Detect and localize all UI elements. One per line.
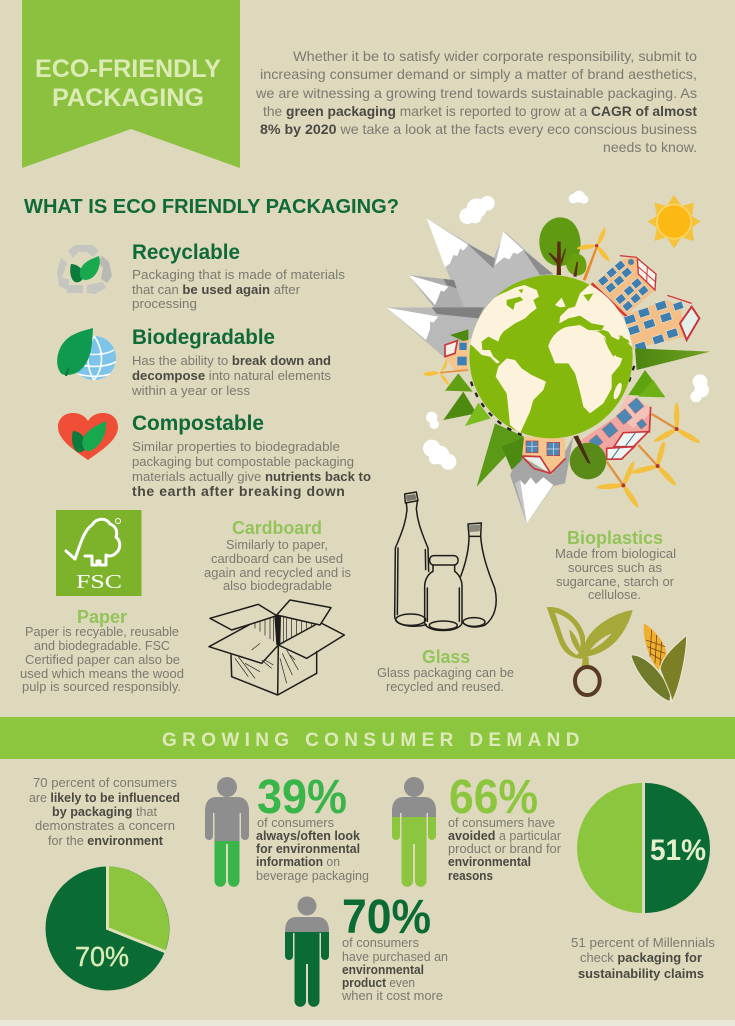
person stat: 70 percent: 70% <box>342 891 431 944</box>
stat text: 70 percent influenced: 70 percent of consumers <box>33 775 178 790</box>
cardboard text: cardboard can be used <box>211 551 343 566</box>
icon: FSC logo <box>56 510 142 596</box>
bottom: mountain, house, buildings, windmills <box>510 395 701 523</box>
recyclable text <box>132 267 346 311</box>
land: africa <box>548 325 622 413</box>
compostable text: Similar properties to biodegradable <box>132 439 340 454</box>
land: eurasia <box>559 283 635 350</box>
globe <box>467 275 635 438</box>
stat text: 51 percent of millennials: sustainability claims <box>578 966 704 981</box>
illustration: earth with mountains, trees and houses <box>387 191 710 523</box>
panel: cardboard <box>204 518 351 695</box>
spike tree right <box>635 348 710 370</box>
compostable text: materials actually give nutrients back to <box>132 469 371 484</box>
icon: sprout <box>547 607 633 695</box>
compostable text: the earth after breaking down <box>132 483 345 499</box>
stat text: 70 percent influenced: demonstrates a concern <box>35 818 175 833</box>
house bottom <box>522 437 566 473</box>
person stat: 66 percent: of consumers have <box>448 815 555 830</box>
bioplastics text: Made from biological <box>555 546 676 561</box>
person stat: 39 percent: beverage packaging <box>256 868 369 883</box>
panel: bioplastics <box>547 528 687 702</box>
intro paragraph: we are witnessing a growing trend towards sustainable packaging. As <box>255 85 697 101</box>
recyclable text: Packaging that is made of materials <box>132 267 346 282</box>
person stat: 66 percent: reasons <box>448 868 493 883</box>
panel: glass <box>377 492 514 694</box>
person stat: 39 percent: information on <box>256 854 340 869</box>
intro paragraph: increasing consumer demand or simply a matter of brand aesthetics, <box>260 66 697 82</box>
person stat: 39 percent <box>205 771 369 887</box>
seas <box>507 289 630 357</box>
paper heading: Paper <box>77 607 127 627</box>
person stat: 66 percent: product or brand for <box>448 841 562 856</box>
stat text: 70 percent influenced: by packaging that <box>52 804 157 819</box>
compostable text: packaging but compostable packaging <box>132 454 354 469</box>
section band: growing consumer demand: GROWING CONSUMER DEMAND <box>162 730 585 751</box>
header banner: ECO-FRIENDLY <box>35 55 221 83</box>
intro paragraph: Whether it be to satisfy wider corporate responsibility, submit to <box>293 48 697 64</box>
buildings right <box>592 256 710 370</box>
person stat: 70 percent: of consumers <box>342 935 419 950</box>
intro paragraph: 8% by 2020 we take a look at the facts every eco conscious business <box>260 121 697 137</box>
right trees <box>628 370 665 397</box>
pie chart: 51 percent <box>577 783 710 913</box>
glass heading: Glass <box>422 647 470 667</box>
glass text: recycled and reused. <box>386 679 504 694</box>
land: south america <box>496 358 546 433</box>
cardboard text: again and recycled and is <box>204 565 351 580</box>
biodegradable heading: Biodegradable <box>132 326 275 349</box>
recyclable text: processing <box>132 296 197 311</box>
bioplastics text: cellulose. <box>588 587 641 602</box>
person stat: 70 percent: when it cost more <box>341 988 443 1003</box>
person stat: 39 percent: always/often look <box>256 828 361 843</box>
recyclable heading: Recyclable <box>132 241 240 264</box>
windmills bottom right <box>597 403 701 509</box>
person stat: 70 percent: product even <box>342 975 415 990</box>
section heading: what is eco friendly packaging: WHAT IS ECO FRIENDLY PACKAGING? <box>24 196 399 218</box>
stat text: 70 percent influenced: are likely to be influenced <box>29 790 180 805</box>
trees bottom left <box>443 329 524 487</box>
windmill top <box>577 227 610 281</box>
person stat: 66 percent: environmental <box>448 854 531 869</box>
paper text <box>20 624 184 694</box>
paper text: and biodegradable. FSC <box>34 638 170 653</box>
biodegradable text: within a year or less <box>131 383 251 398</box>
cardboard text <box>204 537 351 593</box>
person stat: 39 percent: for environmental <box>256 841 360 856</box>
intro paragraph: needs to know. <box>603 139 697 155</box>
paper text: pulp is sourced responsibly. <box>22 679 181 694</box>
person stat: 70 percent: have purchased an <box>342 949 448 964</box>
person stat: 66 percent <box>392 771 562 887</box>
biodegradable text: Has the ability to break down and <box>132 353 331 368</box>
bioplastics text <box>555 546 676 602</box>
recyclable text: that can be used again after <box>132 282 301 297</box>
person stat: 70 percent: environmental <box>342 962 424 977</box>
section band: growing consumer demand <box>0 717 735 759</box>
bioplastics heading: Bioplastics <box>567 528 663 548</box>
stat text: 51 percent of millennials <box>571 935 715 981</box>
icon: glass bottles <box>395 492 496 630</box>
icon: heart with leaves <box>58 413 118 460</box>
person stat: 70 percent <box>285 891 448 1007</box>
bioplastics text: sugarcane, starch or <box>556 574 675 589</box>
paper text: Certified paper can also be <box>25 652 180 667</box>
house left with windmill <box>423 340 468 386</box>
bottom strip <box>0 1020 735 1026</box>
header banner: PACKAGING <box>52 84 204 112</box>
icon: leaf and globe <box>57 328 116 380</box>
bioplastics text: sources such as <box>568 560 662 575</box>
icon: sun <box>648 195 701 248</box>
person stat: 39 percent: 39% <box>257 771 347 824</box>
mountains <box>387 218 553 357</box>
stat text: 51 percent of millennials: 51 percent of Millennials <box>571 935 715 950</box>
pink building <box>578 395 651 460</box>
glass text <box>377 665 514 694</box>
person stat: 66 percent: 66% <box>449 771 538 824</box>
icon: corn <box>631 623 687 702</box>
biodegradable text <box>131 353 332 398</box>
stat text: 51 percent of millennials: check packaging for <box>580 950 702 965</box>
icon: FSC logo: FSC <box>76 571 122 593</box>
compostable text <box>132 439 371 499</box>
intro paragraph <box>255 48 697 155</box>
clouds <box>423 191 709 470</box>
trees top <box>539 217 586 277</box>
header banner <box>22 0 240 168</box>
land: britain <box>555 298 566 307</box>
round tree <box>570 435 606 479</box>
pie chart: 70 percent: 70% <box>75 941 129 972</box>
intro paragraph: the green packaging market is reported to grow at a CAGR of almost <box>263 103 697 119</box>
land: madagascar <box>614 382 622 400</box>
glass text: Glass packaging can be <box>377 665 514 680</box>
stat text: 70 percent influenced <box>29 775 180 848</box>
pie chart: 70 percent <box>46 866 170 990</box>
paper text: used which means the wood <box>20 666 184 681</box>
biodegradable text: decompose into natural elements <box>132 368 332 383</box>
icon: recycling leaf <box>57 245 112 294</box>
panel: paper <box>20 510 184 694</box>
cardboard text: Similarly to paper, <box>226 537 328 552</box>
person stat: 39 percent: of consumers <box>257 815 334 830</box>
icon: cardboard box <box>209 600 344 695</box>
land: north america and greenland <box>467 285 539 363</box>
pie chart: 51 percent: 51% <box>650 834 706 867</box>
stat text: 70 percent influenced: for the environment <box>48 833 164 848</box>
paper text: Paper is recyable, reusable <box>25 624 179 639</box>
bottom mountain <box>510 437 573 523</box>
cardboard text: also biodegradable <box>223 578 332 593</box>
cardboard heading: Cardboard <box>232 518 322 538</box>
compostable heading: Compostable <box>132 412 264 435</box>
person stat: 66 percent: avoided a particular <box>448 828 562 843</box>
